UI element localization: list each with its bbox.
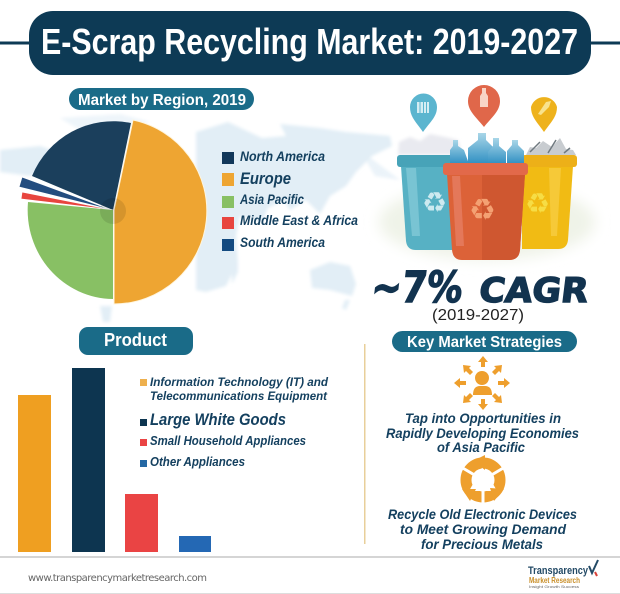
logo: Market Research <box>529 576 580 585</box>
recyclables: cans <box>526 138 576 155</box>
heading: key market strategies: Key Market Strategies <box>407 334 562 351</box>
text: strategy 1: Rapidly Developing Economies <box>386 425 579 441</box>
bin: red <box>443 163 528 260</box>
legend: regions <box>222 149 358 251</box>
recyclables: bottles <box>450 133 524 164</box>
legend: products: Telecommunications Equipment <box>150 389 328 403</box>
pie slice: Middle East and Africa <box>21 192 113 210</box>
stat: CAGR: ~7% <box>369 263 466 313</box>
footer url: www.transparencymarketresearch.com <box>28 573 207 584</box>
logo: Transparency <box>528 565 589 577</box>
recyclables: paper <box>398 134 462 155</box>
text: strategy 2 <box>388 506 577 552</box>
legend: regions: Asia Pacific <box>239 192 304 207</box>
text: strategy 2: for Precious Metals <box>421 536 543 552</box>
illustration: recycling bins <box>379 85 595 260</box>
text: strategy 2: to Meet Growing Demand <box>400 521 566 537</box>
pie slice: South America <box>19 177 112 210</box>
icon: bottle pin <box>468 85 500 127</box>
bin: blue: ♻ <box>422 186 447 219</box>
legend: products: Other Appliances <box>150 455 245 469</box>
icon: recycle <box>461 455 505 505</box>
legend: products: Information Technology (IT) and <box>150 375 329 389</box>
stat: CAGR <box>369 263 591 324</box>
bin: blue <box>397 155 460 250</box>
title banner <box>0 11 620 75</box>
divider <box>364 344 366 544</box>
heading: market by region: Market by Region, 2019 <box>78 92 246 109</box>
logo: Insight Growth Success <box>529 585 579 589</box>
pie slice: Europe <box>114 120 207 304</box>
legend: products <box>140 375 329 469</box>
legend: regions: South America <box>240 235 325 250</box>
logo <box>528 560 598 589</box>
legend: products: Small Household Appliances <box>150 434 306 448</box>
stat: CAGR: (2019-2027) <box>432 307 524 324</box>
world map background <box>0 114 400 322</box>
bar chart: product <box>18 368 211 552</box>
icon: person with arrows <box>454 356 510 410</box>
text: strategy 1: Tap into Opportunities in <box>405 410 561 426</box>
pie chart <box>19 120 207 304</box>
text: strategy 2: Recycle Old Electronic Devices <box>388 506 577 522</box>
legend: regions: Europe <box>240 169 291 188</box>
legend: products: Large White Goods <box>150 411 286 429</box>
footer lines <box>0 556 620 558</box>
legend: regions: Middle East & Africa <box>240 213 358 228</box>
stat: CAGR: CAGR <box>477 271 591 311</box>
pie slice: North America <box>32 121 131 210</box>
text: strategy 1 <box>386 410 579 455</box>
text: strategy 1: of Asia Pacific <box>437 439 525 455</box>
heading: product <box>79 327 193 355</box>
icon: paper pin <box>410 94 437 132</box>
bin: yellow: ♻ <box>525 187 550 220</box>
heading: product: Product <box>104 330 167 350</box>
bin: yellow <box>522 155 577 249</box>
pie slice: Asia Pacific <box>28 202 113 299</box>
legend: regions: North America <box>240 149 325 164</box>
bin: red: ♻ <box>469 193 496 228</box>
icon: metal pin <box>531 97 557 132</box>
